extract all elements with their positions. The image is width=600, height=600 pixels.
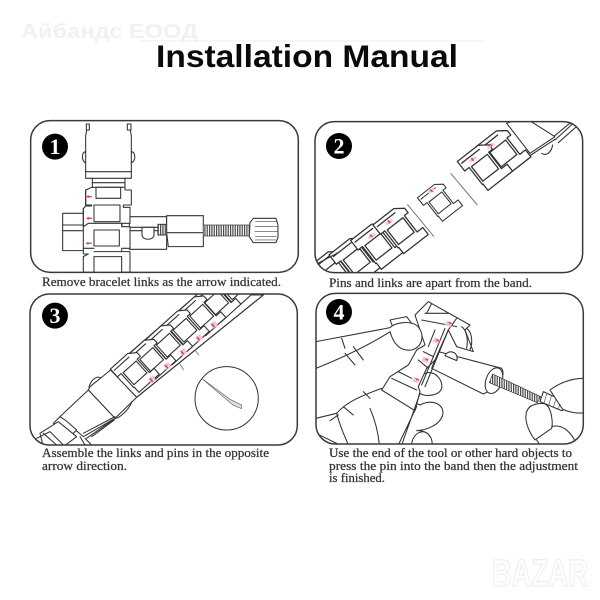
illustration: pin detail circle [195, 367, 258, 430]
badge 3: 3 [49, 303, 60, 328]
illustration: bracelet links [83, 183, 131, 273]
caption 4 line 1: Use the end of the tool or other hard objects to [329, 446, 572, 460]
illustration: upper thumb holding [316, 317, 422, 368]
panel 4 border [316, 293, 583, 444]
caption 1: Remove bracelet links as the arrow indicated. [42, 275, 281, 289]
caption 2: Pins and links are apart from the band. [329, 276, 532, 290]
badge 3 [42, 303, 68, 329]
badge 4: 4 [333, 299, 344, 324]
illustration: lower band [317, 208, 429, 272]
illustration: band end with clasp [456, 122, 576, 191]
pink arrow markers [86, 195, 92, 245]
illustration: clasp [82, 124, 135, 183]
illustration: pink markers and pins [148, 321, 218, 383]
panel: step 1 [31, 121, 298, 273]
badge 2 [326, 133, 352, 159]
badge 4 [326, 299, 352, 325]
caption 4 line 3: is finished. [329, 471, 385, 485]
badge 2: 2 [333, 133, 344, 158]
illustration: removed link [416, 184, 463, 222]
illustration: tool body and screw [432, 352, 566, 411]
panel: step 4 [316, 293, 585, 447]
panel: step 3 [29, 293, 298, 446]
caption 3 second line: arrow direction. [42, 459, 127, 473]
badge 1: 1 [49, 134, 60, 159]
illustration: bracelet links held [382, 302, 473, 445]
illustration: left holding hand [316, 373, 443, 447]
panel: step 2 [314, 120, 584, 274]
panel 2 border [315, 122, 583, 273]
watermark: company name: Айбандс ЕООД [21, 21, 198, 43]
illustration: clasp [37, 370, 137, 447]
panel 1 border [31, 121, 298, 272]
arrows: removal direction [407, 173, 477, 237]
caption 3: Assemble the links and pins in the opposite [42, 446, 269, 460]
illustration: bracelet links diagonal [109, 294, 264, 398]
badge 1 [42, 134, 68, 160]
title: Installation Manual [156, 38, 458, 74]
caption 4 line 2: press the pin into the band then the adjustment [329, 459, 579, 473]
illustration: pin tool frame [63, 213, 278, 251]
illustration: right fingers turning knob [526, 378, 585, 445]
panel 3 border [30, 294, 297, 445]
